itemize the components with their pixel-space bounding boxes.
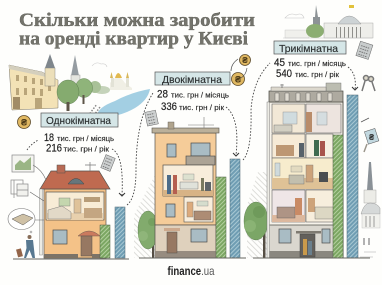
icon: calculator — [356, 41, 373, 59]
bar: blue — [347, 95, 358, 258]
text: two-room income: 336 — [161, 101, 177, 113]
arrow: coin to coin — [231, 59, 247, 78]
label: three-room: Трикімнатна — [279, 43, 338, 55]
label: two-room — [155, 72, 230, 86]
bar: blue — [115, 207, 125, 258]
bar: green — [333, 135, 343, 258]
ground line — [13, 258, 129, 260]
panel: three-room apartment house — [244, 83, 370, 258]
building — [267, 83, 343, 258]
icon: growth chart — [12, 155, 34, 172]
arrowhead — [119, 193, 125, 196]
title: на оренді квартир у Києві — [19, 28, 248, 50]
text: one-room income: тис. грн / рік — [64, 144, 110, 154]
arrow: blue bar to 45 — [243, 63, 270, 160]
label: one-room: Однокімнатна — [46, 115, 111, 127]
icon: keys — [362, 76, 375, 91]
icon: coin: ₴ — [21, 118, 28, 128]
arrow: 216 to blue bar — [112, 149, 122, 195]
text: three-room income — [274, 57, 346, 80]
text: three-room income: 45 — [274, 57, 285, 69]
arrow: blue bar to 28 — [127, 93, 153, 205]
icon: room plan — [11, 180, 28, 198]
icon: coin — [232, 72, 244, 86]
title: Скільки можна заробити — [19, 10, 255, 31]
icon: key tag: ₴ — [369, 133, 375, 142]
arrow: 336 to blue bar — [226, 107, 237, 155]
bar: green — [100, 225, 110, 258]
illustration: Kyiv parliament skyline — [283, 5, 373, 38]
text: one-room income: 216 — [46, 142, 62, 154]
icon: calculator — [145, 110, 158, 126]
label: two-room: Двокімнатна — [162, 74, 222, 86]
arrow: 540 to blue bar — [348, 67, 355, 90]
panel: two-room apartment house — [134, 110, 246, 258]
arrowhead — [233, 153, 239, 156]
text: one-room income: 18 — [44, 132, 54, 144]
icon: coin — [18, 116, 30, 128]
house building — [40, 162, 110, 258]
tree — [138, 211, 158, 258]
icon: key tag — [364, 128, 379, 152]
illustration: church tower — [360, 162, 380, 257]
arrow: chart to 18 — [27, 140, 38, 150]
text: two-room income — [157, 88, 229, 113]
hatch shadow — [134, 175, 155, 258]
bar: blue — [230, 159, 240, 258]
text: three-room income: 540 — [276, 68, 292, 80]
icon: calculator — [101, 155, 115, 171]
ground line — [253, 257, 370, 259]
text: three-room income: тис. грн / рік — [295, 70, 340, 79]
text: two-room income: 28 — [157, 88, 168, 100]
text: one-room income: тис. грн / місяць — [57, 134, 114, 143]
icon: traveller with suitcase — [16, 235, 35, 258]
icon: bed bubble — [8, 208, 35, 233]
illustration: Kyiv riverside skyline — [9, 54, 150, 118]
icon: coin: ₴ — [235, 74, 242, 86]
text: two-room income: тис. грн / місяць — [171, 90, 229, 100]
title — [19, 10, 255, 50]
text: two-room income: тис. грн / рік — [179, 103, 225, 112]
tree — [244, 202, 268, 258]
ground line — [139, 257, 246, 259]
icon: coin — [240, 54, 250, 66]
text: one-room income — [44, 132, 114, 154]
logo: finance.ua: finance.ua — [168, 264, 215, 278]
connector lines — [30, 165, 46, 220]
icon: coin: ₴ — [242, 55, 248, 65]
panel: one-room apartment house — [8, 155, 129, 259]
arrowhead — [352, 87, 358, 90]
building — [152, 117, 219, 258]
text: three-room income: тис. грн / місяць — [288, 59, 346, 68]
bar: green — [216, 177, 226, 258]
arrow: tag pointer — [361, 118, 369, 122]
hatch shadow — [247, 172, 268, 258]
